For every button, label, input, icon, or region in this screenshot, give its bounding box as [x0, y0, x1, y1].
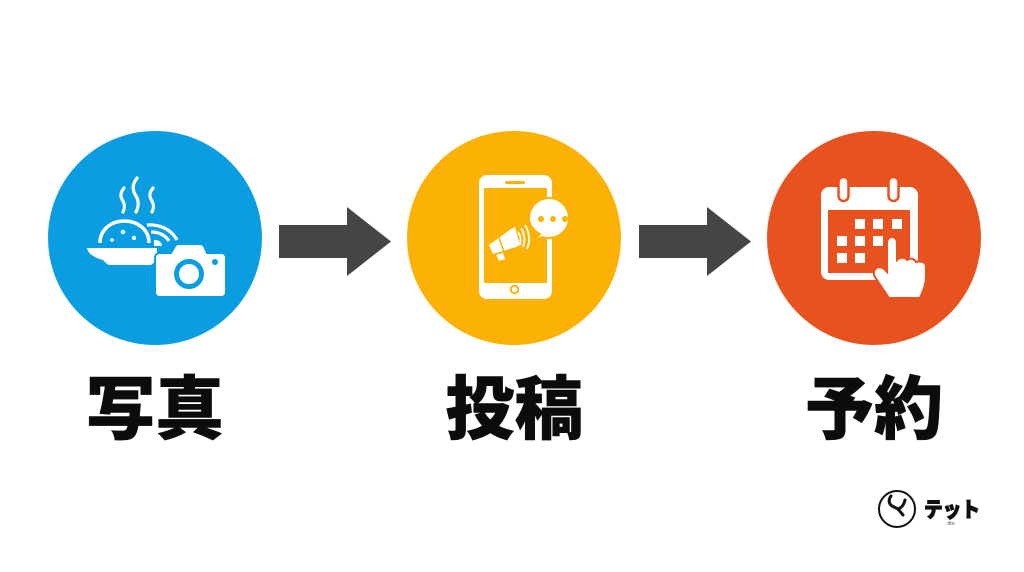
arrow 1 [279, 207, 391, 276]
icon: steam [121, 178, 154, 212]
icon: speech bubble [529, 198, 569, 242]
yellow circle [407, 131, 621, 345]
step 2: post [407, 131, 621, 345]
label: photo: 写真 [86, 371, 224, 448]
arrow 2 [639, 207, 751, 276]
icon: smartphone [479, 175, 552, 299]
icon: pointing hand [874, 237, 926, 298]
label: post: 投稿 [446, 371, 584, 448]
logo small text: itto [947, 521, 955, 527]
step 1: photo [48, 131, 262, 345]
step 3: booking [767, 131, 981, 345]
icon: calendar [821, 177, 918, 280]
orange circle [767, 131, 981, 345]
logo mark [879, 491, 915, 527]
label: booking: 予約 [805, 371, 943, 448]
logo [879, 491, 980, 527]
logo wordmark: テット [924, 499, 980, 522]
icon: megaphone [489, 225, 529, 261]
icon: camera [155, 244, 226, 297]
icon: rice and plate [87, 221, 177, 265]
blue circle [48, 131, 262, 345]
